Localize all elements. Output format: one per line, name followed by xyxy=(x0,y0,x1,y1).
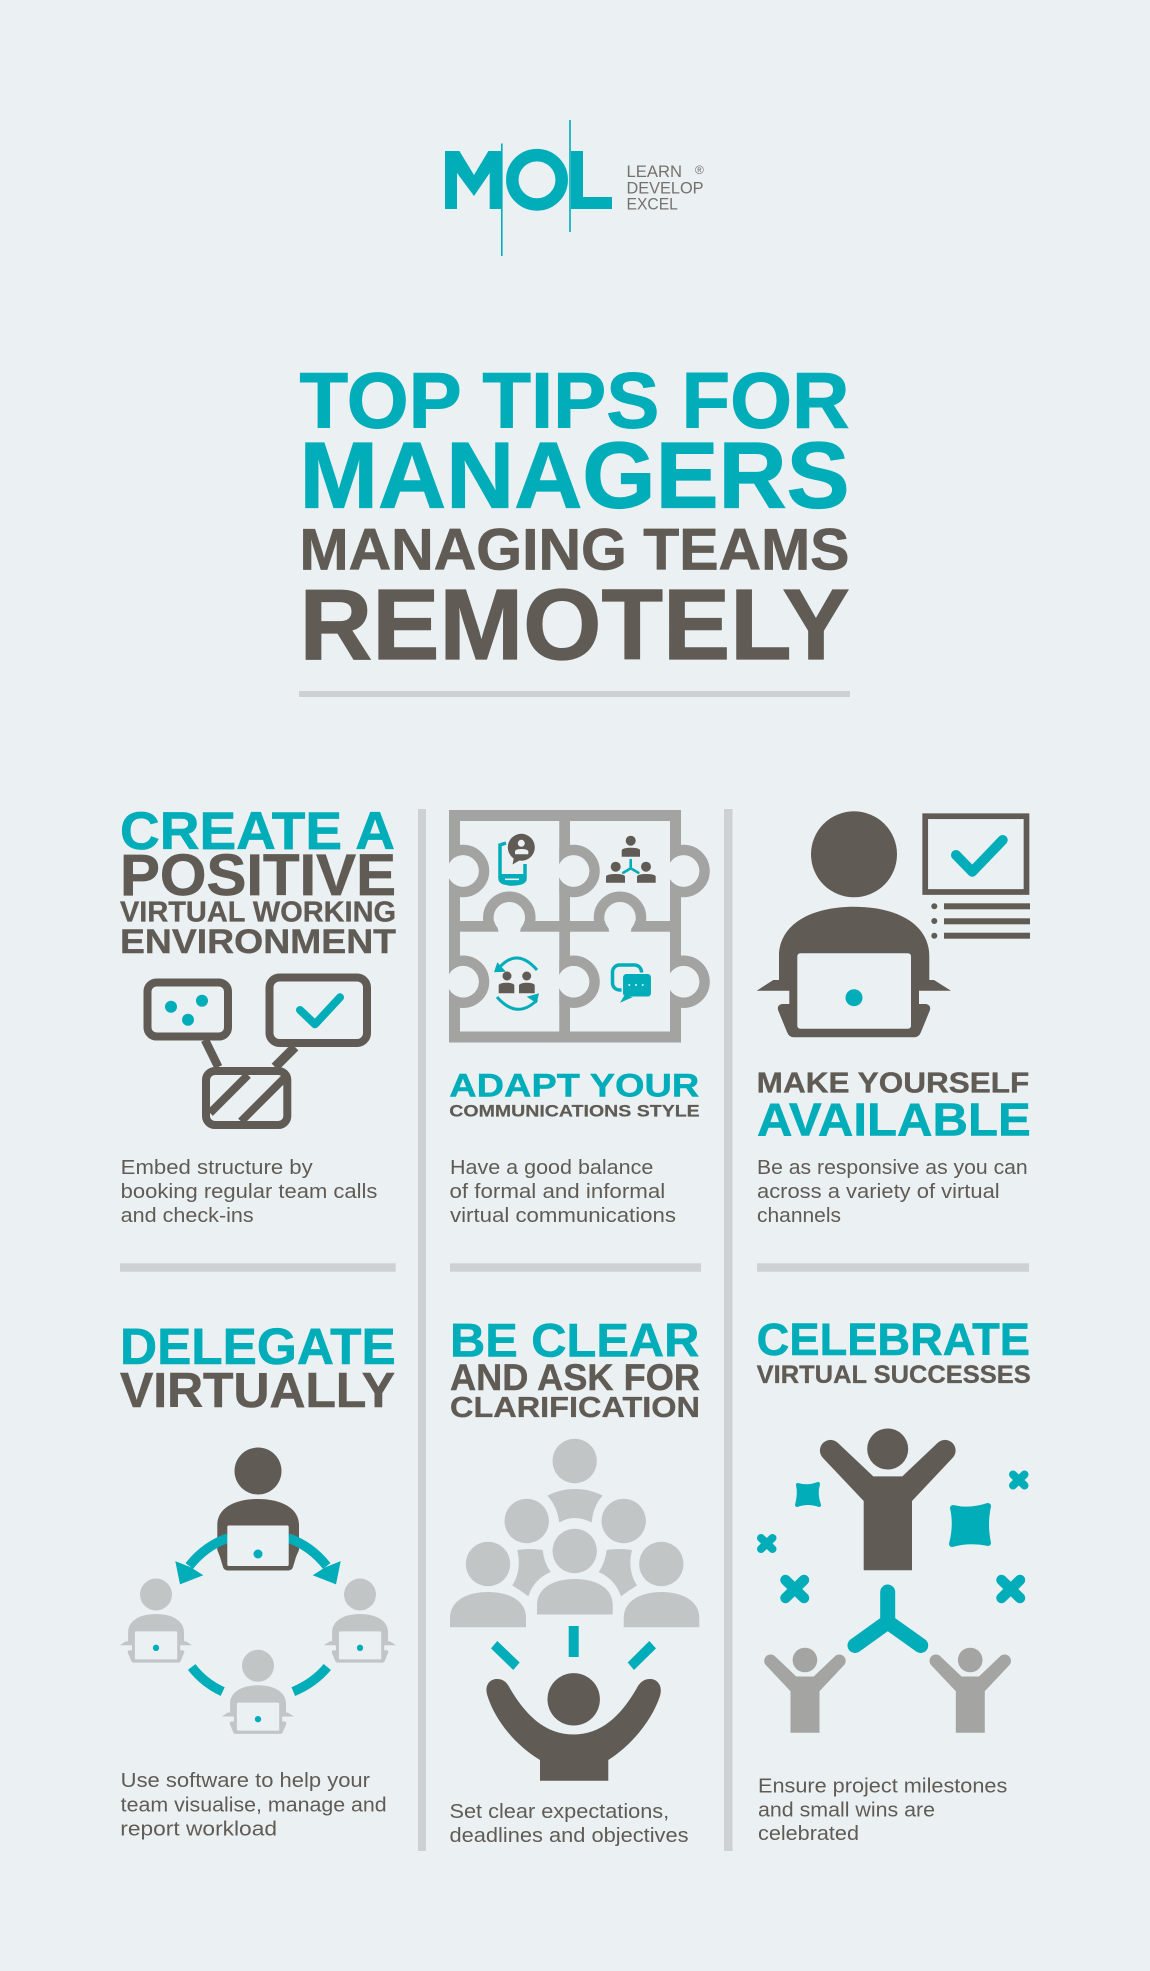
heading: delegate virtually xyxy=(120,1318,396,1418)
heading: be clear: CLARIFICATION xyxy=(450,1392,700,1424)
icon: celebrating figures xyxy=(764,1428,1011,1733)
heading: delegate virtually: VIRTUALLY xyxy=(120,1364,395,1418)
text: use software: team visualise, manage and xyxy=(121,1795,387,1817)
heading: create a positive: ENVIRONMENT xyxy=(120,923,396,961)
icon: crowd of people xyxy=(450,1439,699,1627)
heading: create a positive: CREATE A xyxy=(120,802,395,861)
heading: create a positive: VIRTUAL WORKING xyxy=(120,896,396,928)
text: set clear expectations xyxy=(450,1801,688,1847)
text: embed structure: Embed structure by xyxy=(121,1157,313,1179)
panel: celebrate virtual successes xyxy=(757,1314,1031,1845)
text: ensure milestones: and small wins are xyxy=(758,1799,935,1821)
text: good balance: Have a good balance xyxy=(450,1157,653,1179)
text: use software: report workload xyxy=(120,1818,277,1840)
icon: puzzle xyxy=(442,810,704,1042)
title: REMOTELY xyxy=(300,569,850,681)
heading: be clear: AND ASK FOR xyxy=(450,1357,700,1398)
text: be responsive: channels xyxy=(757,1205,841,1227)
icon: confetti xyxy=(761,1474,1024,1598)
text: ensure milestones: celebrated xyxy=(758,1823,859,1845)
text: be responsive: Be as responsive as you can xyxy=(757,1157,1028,1179)
heading: celebrate: VIRTUAL SUCCESSES xyxy=(757,1361,1031,1389)
icon: delegation cycle xyxy=(120,1448,396,1734)
heading: adapt your communications style: ADAPT YOUR xyxy=(449,1068,699,1104)
heading: create a positive: POSITIVE xyxy=(120,843,396,908)
heading: make yourself available: MAKE YOURSELF xyxy=(757,1068,1029,1100)
logo: MOL: EXCEL xyxy=(626,196,678,214)
logo: MOL: LEARN xyxy=(626,163,682,181)
text: be responsive xyxy=(757,1157,1028,1227)
title: MANAGERS xyxy=(300,422,850,527)
icon: person at laptop xyxy=(757,811,951,1037)
title xyxy=(300,356,850,681)
heading: be clear: BE CLEAR xyxy=(450,1315,699,1368)
logo: MOL xyxy=(445,120,704,256)
heading: make yourself available xyxy=(757,1068,1031,1146)
heading: create a positive xyxy=(120,802,396,961)
logo: MOL: ® xyxy=(695,163,704,177)
text: embed structure xyxy=(121,1157,377,1227)
logo: MOL: DEVELOP xyxy=(626,180,704,198)
text: use software xyxy=(120,1770,387,1840)
icon: teal ticks xyxy=(491,1626,656,1670)
text: good balance: virtual communications xyxy=(450,1205,676,1227)
text: set clear expectations: deadlines and objectives xyxy=(450,1825,688,1847)
heading: celebrate xyxy=(757,1314,1031,1389)
text: ensure milestones xyxy=(758,1776,1007,1845)
text: be responsive: across a variety of virtual xyxy=(757,1181,1000,1203)
text: use software: Use software to help your xyxy=(121,1770,370,1792)
text: good balance xyxy=(450,1157,676,1227)
panel: adapt your communications style xyxy=(442,810,704,1227)
icon: people exchange xyxy=(494,958,539,1009)
icon: manager with raised arms xyxy=(486,1673,661,1781)
panel: make yourself available xyxy=(757,811,1031,1227)
heading: celebrate: CELEBRATE xyxy=(757,1314,1030,1365)
icon: phone with message xyxy=(499,834,535,884)
text: embed structure: booking regular team calls xyxy=(121,1181,377,1203)
icon: team hierarchy xyxy=(606,836,656,883)
heading: be clear xyxy=(450,1315,700,1424)
heading: adapt your communications style: COMMUNICATIONS STYLE xyxy=(449,1102,700,1121)
text: embed structure: and check-ins xyxy=(121,1205,254,1227)
panel: create a positive virtual working environment xyxy=(120,802,396,1227)
heading: delegate virtually: DELEGATE xyxy=(120,1318,396,1375)
panel: be clear and ask for clarification xyxy=(450,1315,700,1847)
title: MANAGING TEAMS xyxy=(300,518,850,583)
text: set clear expectations: Set clear expectations, xyxy=(450,1801,669,1823)
text: ensure milestones: Ensure project milestones xyxy=(758,1776,1007,1798)
icon: chat bubbles xyxy=(612,965,652,1003)
panel: delegate virtually xyxy=(120,1318,396,1840)
title: TOP TIPS FOR xyxy=(300,356,850,444)
text: good balance: of formal and informal xyxy=(450,1181,665,1203)
heading: adapt your communications style xyxy=(449,1068,700,1121)
icon: checklist screen xyxy=(925,816,1030,939)
icon: connected message boxes xyxy=(148,978,367,1125)
heading: make yourself available: AVAILABLE xyxy=(757,1094,1031,1146)
